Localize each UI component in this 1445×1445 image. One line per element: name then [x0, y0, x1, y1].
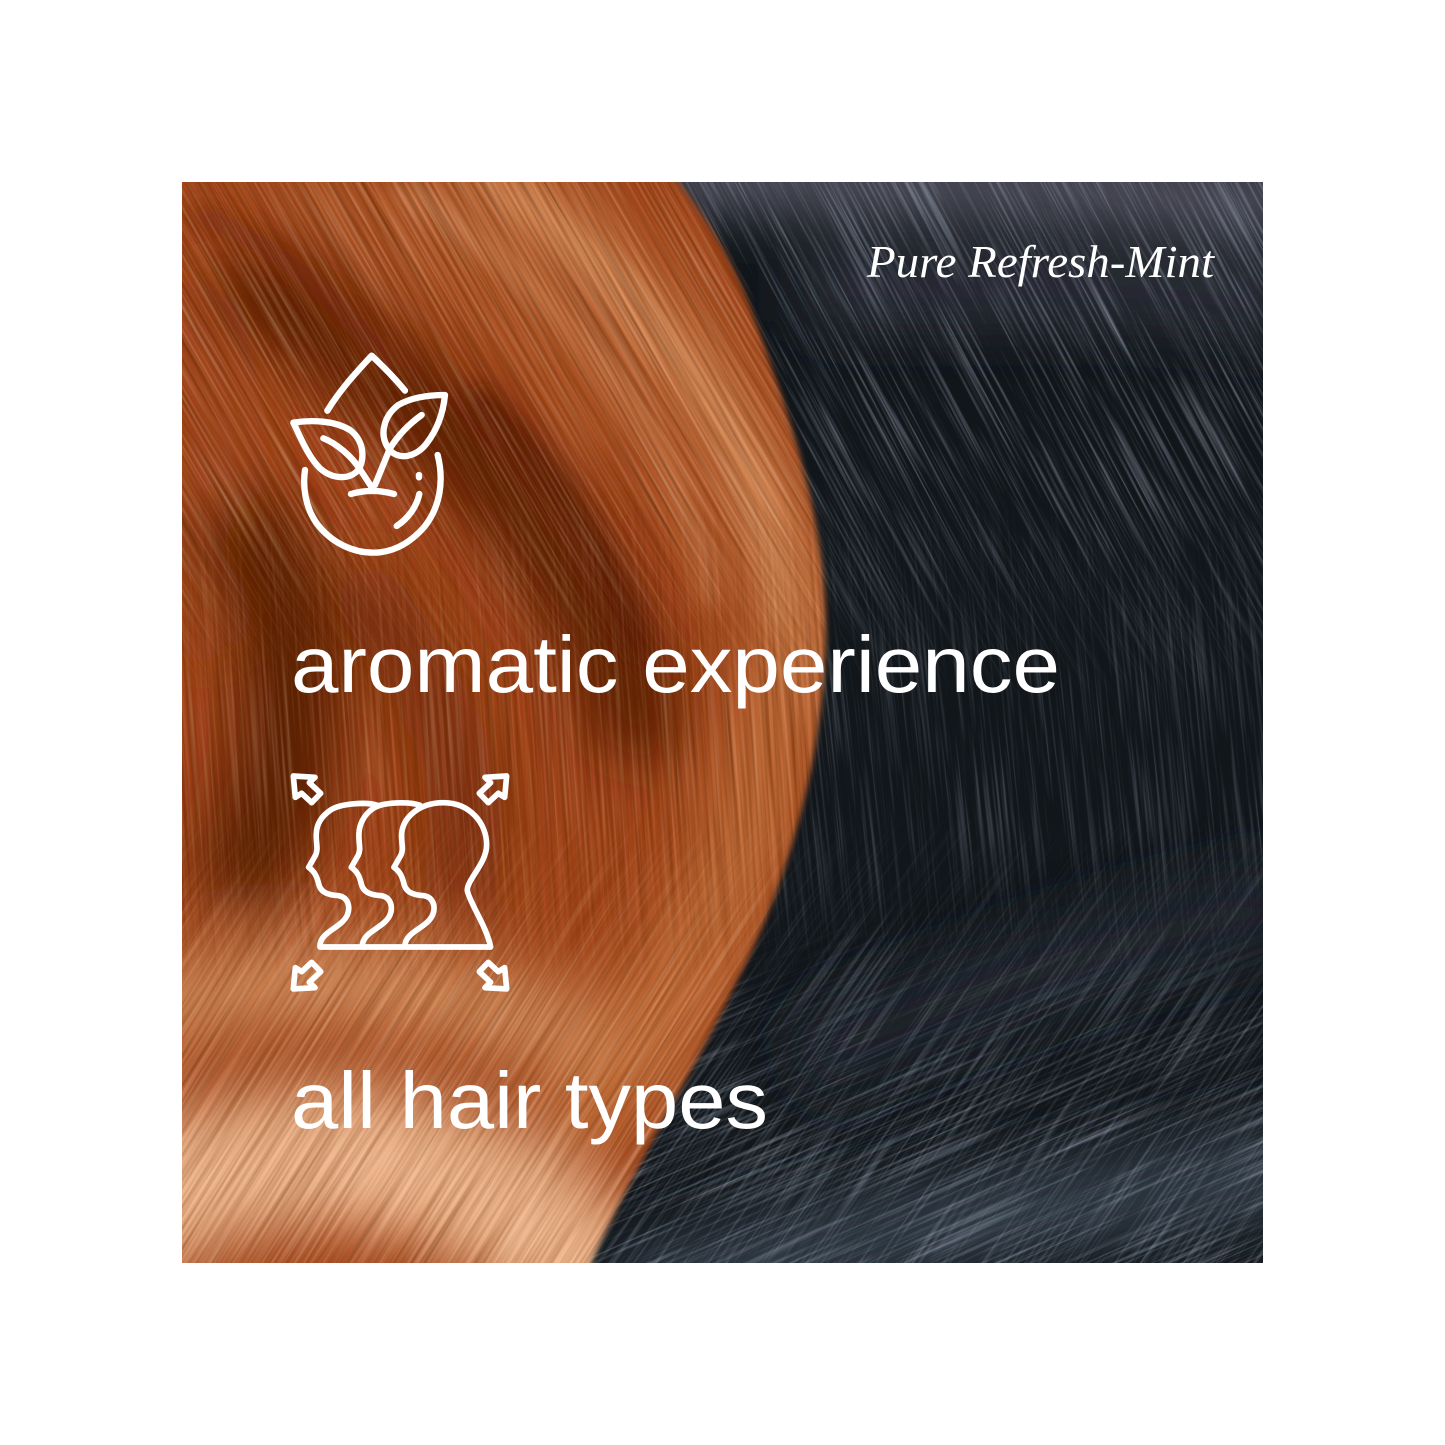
label: product name: Pure Refresh-Mint [866, 236, 1215, 287]
icon: drop with leaves [293, 356, 445, 553]
heading: all hair types: all hair types [291, 1056, 768, 1145]
heading: aromatic experience: aromatic experience [291, 620, 1060, 709]
copper hair [182, 182, 830, 1263]
infographic canvas [182, 182, 1263, 1263]
icon: three head profiles with arrows [293, 776, 507, 989]
photo panel: copper and black hair [182, 182, 1263, 1263]
black hair base [586, 182, 1263, 1263]
